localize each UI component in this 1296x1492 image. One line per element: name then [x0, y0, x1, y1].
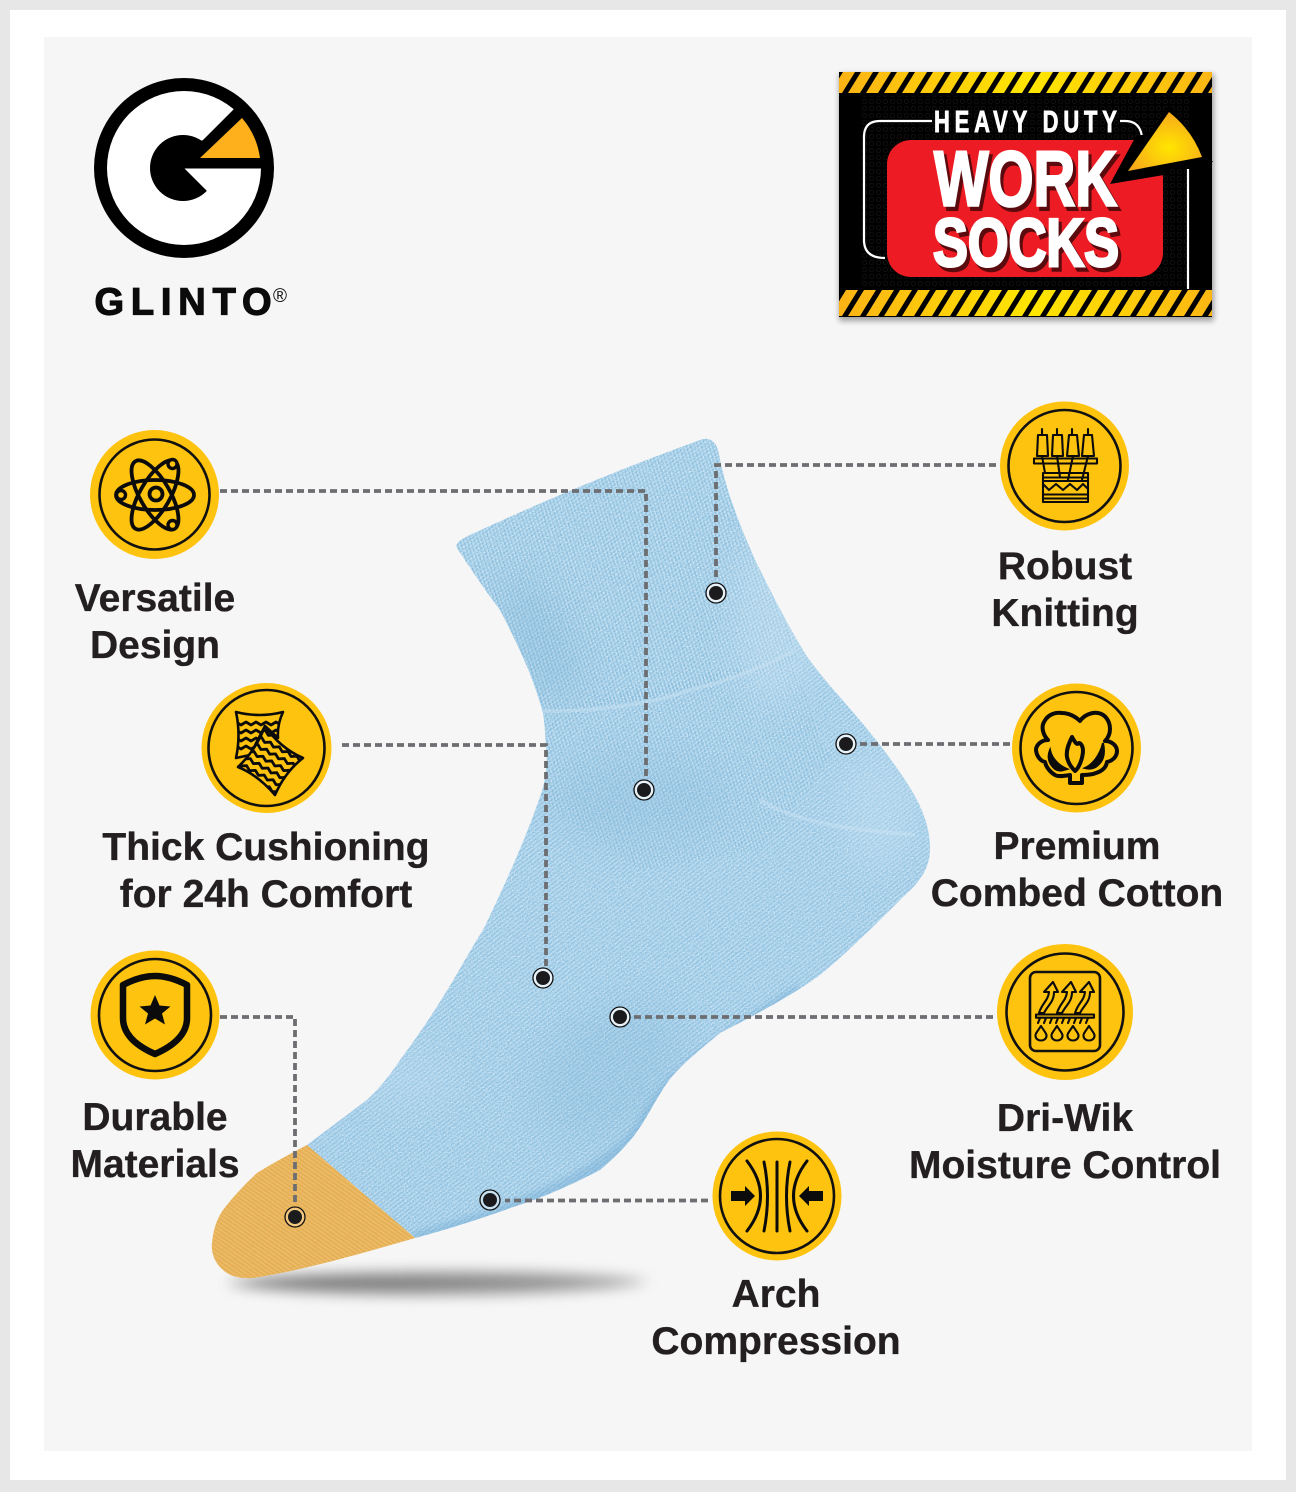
- callout: robust knitting: [706, 402, 1139, 635]
- white bracket lines: [864, 121, 1188, 289]
- front pillow: [236, 724, 304, 796]
- label: [991, 545, 1139, 635]
- icon: moisture wicking: [997, 944, 1133, 1080]
- label: Dri-Wik: [997, 1097, 1133, 1140]
- connector: [220, 1017, 295, 1205]
- label: [75, 577, 235, 667]
- darker rib shading: [498, 576, 586, 703]
- badge text: socks: SOCKS: [936, 209, 1122, 285]
- badge text: socks: SOCKS: [933, 205, 1119, 281]
- connector: [342, 745, 546, 967]
- label: Robust: [998, 545, 1132, 588]
- connector: [860, 742, 1010, 746]
- callout: thick cushioning: [102, 683, 553, 988]
- connector: [634, 1015, 993, 1019]
- connector: [220, 491, 646, 779]
- marker: [610, 1007, 630, 1027]
- callout: arch compression: [480, 1132, 901, 1363]
- callout: dri-wik moisture control: [610, 944, 1221, 1187]
- label: [651, 1273, 901, 1363]
- icon: knitting machine: [1000, 402, 1129, 530]
- badge text: work: WORK: [937, 138, 1120, 226]
- marker: [285, 1207, 305, 1227]
- marker: [480, 1190, 500, 1210]
- callout: durable materials: [70, 950, 305, 1227]
- icon: atom: [90, 430, 219, 559]
- icon: cushion: [202, 683, 332, 813]
- connector: [505, 1199, 708, 1202]
- callout: premium combed cotton: [836, 684, 1223, 915]
- badge: heavy duty work socks: [830, 72, 1236, 321]
- icon: shield: [90, 950, 220, 1080]
- heel seam highlight: [760, 800, 915, 835]
- soft light areas: [735, 530, 815, 710]
- label: for 24h Comfort: [120, 873, 412, 916]
- marker: [836, 734, 856, 754]
- badge text: heavy duty: HEAVY DUTY: [934, 104, 1117, 139]
- label: Materials: [70, 1143, 240, 1186]
- cushion band highlight: [543, 650, 795, 711]
- label: Knitting: [991, 592, 1139, 635]
- marker: [533, 968, 553, 988]
- label: Moisture Control: [909, 1144, 1221, 1187]
- badge text: work: WORK: [934, 134, 1117, 222]
- label: [102, 826, 430, 916]
- connector: [716, 465, 996, 581]
- red panel: [887, 140, 1163, 277]
- icon: compression: [712, 1132, 842, 1260]
- marker: [706, 583, 726, 603]
- darker underside: [415, 990, 800, 1238]
- label: Combed Cotton: [931, 872, 1223, 915]
- black notch: [1110, 130, 1170, 184]
- label: Versatile: [75, 577, 235, 620]
- label: [931, 825, 1223, 915]
- icon: cotton: [1012, 684, 1141, 812]
- sock body: [300, 430, 940, 1250]
- label: Premium: [994, 825, 1160, 868]
- label: Compression: [651, 1320, 901, 1363]
- label: Design: [90, 624, 220, 667]
- hazard stripes top: [830, 72, 1233, 93]
- label: Durable: [82, 1096, 228, 1139]
- logo mark: [94, 78, 275, 258]
- label: Thick Cushioning: [102, 826, 430, 869]
- logo wordmark: GLINTO: [94, 282, 272, 324]
- sock shadow: [225, 1272, 650, 1294]
- registered mark: ®: [273, 286, 287, 307]
- sock toe: [212, 1145, 415, 1278]
- sock illustration: [205, 430, 940, 1282]
- marker: [634, 780, 654, 800]
- yellow wedge: [1121, 105, 1213, 176]
- label: [70, 1096, 240, 1186]
- label: Arch: [732, 1273, 820, 1316]
- hazard stripes bottom: [830, 290, 1236, 316]
- callout: versatile design: [75, 430, 654, 800]
- label: [909, 1097, 1221, 1187]
- logo: Glinto: [94, 78, 287, 324]
- back pillow: [236, 712, 283, 758]
